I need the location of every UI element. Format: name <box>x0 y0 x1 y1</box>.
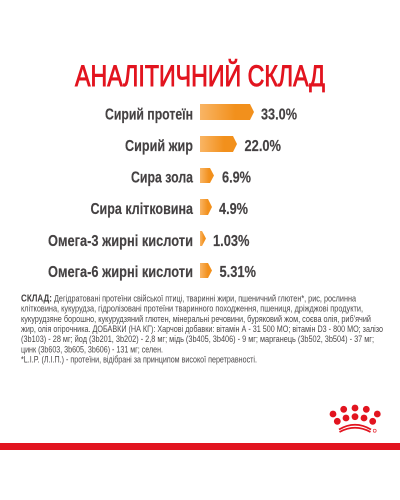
row: crude fat <box>125 136 281 155</box>
row: crude fat: 22.0% <box>244 138 281 155</box>
composition text block <box>21 293 383 364</box>
composition text block: цинк (3b603, 3b605, 3b606) - 131 мг; селен. <box>21 344 163 354</box>
row: crude protein: 33.0% <box>261 106 297 124</box>
title: АНАЛІТИЧНИЙ СКЛАД <box>75 59 325 93</box>
row: omega-6: 5.31% <box>220 264 256 281</box>
row: crude fibre: Сира клітковина <box>90 201 193 218</box>
row: crude protein <box>105 104 297 124</box>
row: crude ash: 6.9% <box>222 170 251 187</box>
row: crude protein: Сирий протеїн <box>105 106 193 124</box>
row: crude fibre: 4.9% <box>219 201 248 218</box>
row: crude ash <box>131 168 251 187</box>
panel: nutrient bar chart <box>48 104 297 281</box>
row: omega-3: 1.03% <box>213 233 250 250</box>
row: crude ash: Сира зола <box>131 170 193 187</box>
icon: royal crown logo <box>330 405 381 432</box>
row: crude fat: Сирий жир <box>125 138 193 155</box>
row: omega-3: Омега-3 жирні кислоти <box>48 233 193 250</box>
row: omega-6: Омега-6 жирні кислоти <box>48 264 193 281</box>
composition text block: *L.I.P. (Л.І.П.) - протеїни, відібрані за принципом високої перетравності. <box>21 354 257 364</box>
composition text block: СКЛАД: <box>21 293 52 305</box>
footer red bar <box>0 443 400 450</box>
